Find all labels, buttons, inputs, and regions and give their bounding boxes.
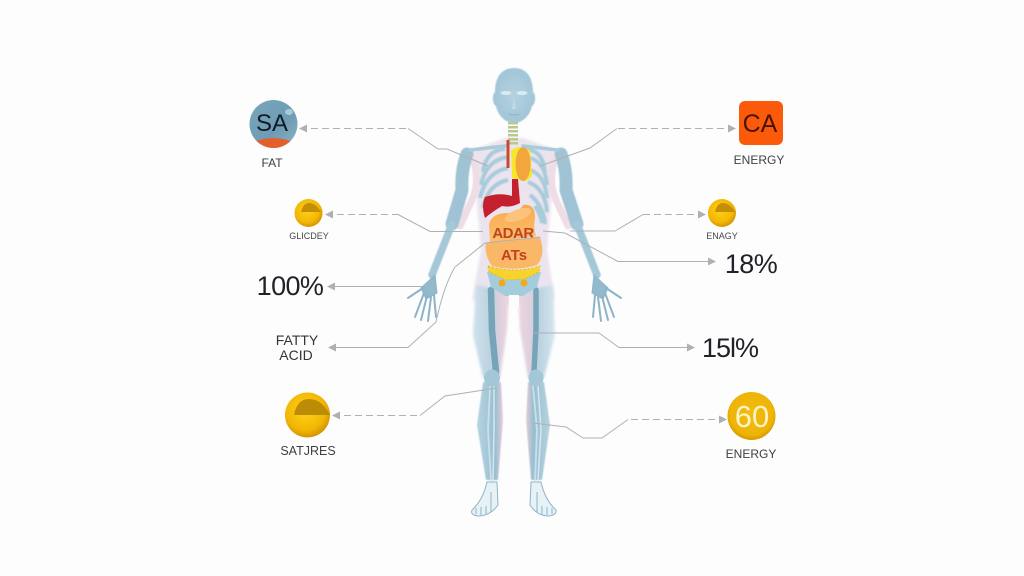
leader: 18% [543,231,715,262]
label: ENERGY top: ENERGY [734,153,784,167]
orange lung organ [516,147,530,181]
ribcage [480,149,547,224]
yellow organ [511,147,532,181]
right calf [526,382,550,480]
head [493,68,535,123]
label: FATTY ACID [276,332,319,363]
hands [408,275,621,321]
right thigh [518,285,555,378]
leader: GLICDEY [326,214,483,232]
leader: SA [300,128,488,166]
pelvic opening [509,295,519,307]
icon: gold 60 ball: 60 [735,399,769,434]
pelvis [487,272,541,296]
icon: SA globe: SA [256,110,288,137]
leader: FATTY ACID [329,237,540,348]
label: SATJRES: SATJRES [280,444,336,458]
icon: gold 60 ball [728,392,776,440]
icon: small gold ball right [708,199,736,227]
abdomen with labels [486,205,542,269]
abdomen with labels: ATs [501,247,527,264]
value: 151%: 15l% [702,333,759,363]
icon: small gold ball left [294,199,322,227]
yellow fat cluster [488,266,540,280]
abdomen with labels: ADAR [492,225,534,242]
leader: ENAGY [570,214,705,231]
arms [432,154,597,275]
icon: CA square [739,101,783,145]
label: FAT: FAT [261,156,283,170]
icon: CA square: CA [743,110,778,138]
label: FATTY ACID: ACID [279,347,313,363]
leg bones [488,290,541,480]
leader: SATJRES [333,388,497,416]
value: 100%: 100% [257,271,324,301]
label: ENERGY bottom: ENERGY [726,447,776,461]
leader: 100% [328,286,424,288]
knees [484,370,544,386]
torso silhouette [472,138,556,305]
thyroid chain [508,122,518,146]
icon: large gold ball [285,392,330,438]
label: ENAGY: ENAGY [706,231,738,241]
leader: CA [540,128,735,166]
red liver [483,179,520,218]
left calf [477,382,503,480]
label: FATTY ACID: FATTY [276,332,319,348]
feet [472,482,556,516]
human body figure [408,68,621,516]
value: 18%: 18% [725,249,778,279]
label: GLICDEY: GLICDEY [289,231,329,241]
esophagus [506,140,510,168]
left thigh [473,285,509,378]
pelvic dots [498,280,528,286]
leader: 151% [534,333,694,348]
leader: 60 [533,420,726,438]
neck and clavicles [470,146,558,150]
icon: SA globe [250,100,298,148]
